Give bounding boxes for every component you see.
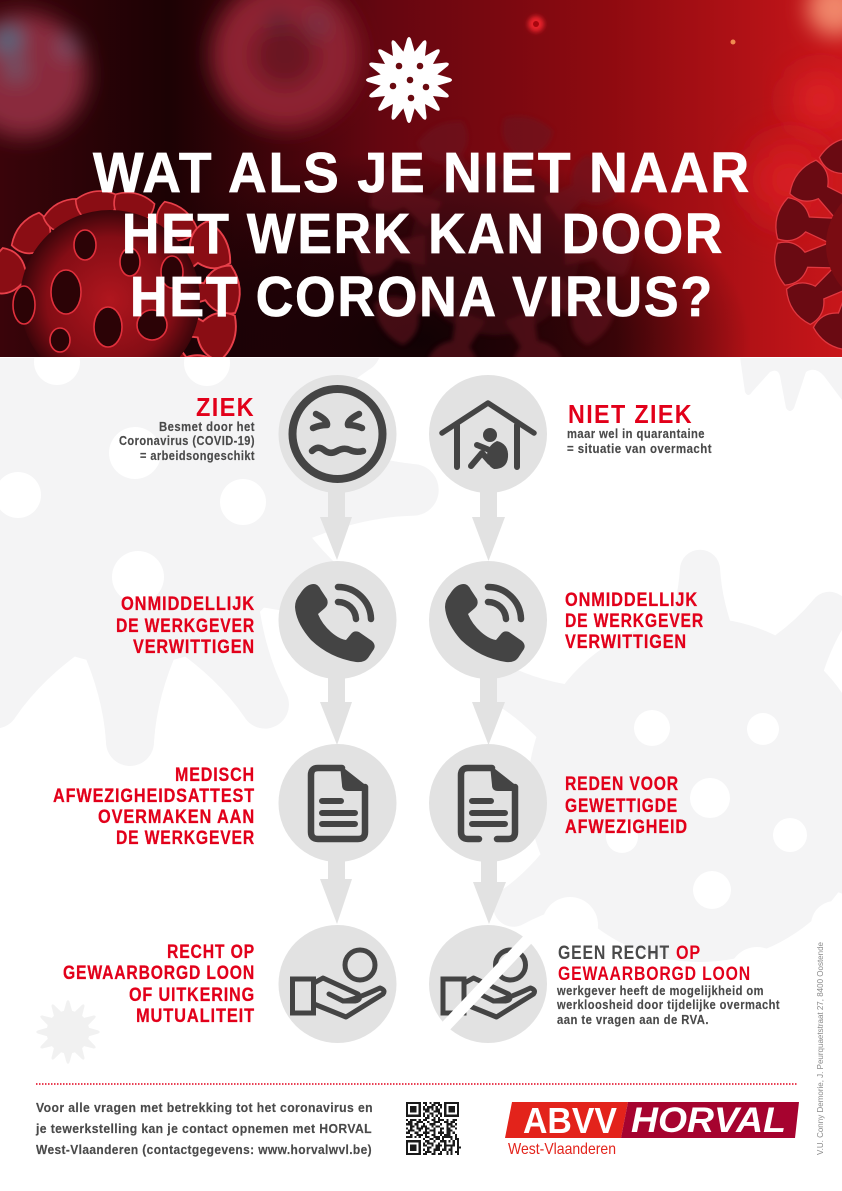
footer contact text: Voor alle vragen met betrekking tot het coronavirus en (36, 1101, 373, 1115)
text: niet ziek: = situatie van overmacht (567, 442, 712, 456)
background pale virus shapes (0, 294, 842, 1064)
text: ziek: Besmet door het (159, 420, 255, 434)
text: geen recht op loon: werkgever heeft de mogelijkheid om (556, 984, 764, 998)
icon: phone left (295, 584, 375, 662)
title (93, 141, 751, 329)
arrow right 1 (472, 490, 505, 561)
step circles (278, 375, 547, 1043)
arrow left 1 (320, 490, 352, 560)
glow spots (528, 0, 842, 220)
text: onmiddellijk right (565, 590, 704, 653)
icon: hand with coin right, crossed out (443, 937, 534, 1026)
text: recht op loon: OF UITKERING (129, 985, 255, 1006)
text: onmiddellijk left: DE WERKGEVER (116, 616, 255, 637)
text: onmiddellijk right: ONMIDDELLIJK (565, 590, 698, 611)
vertical legal text: V.U. Conny Demorie, J. Peurquaetstraat 27, 8400 Oostende (815, 942, 825, 1155)
text: niet ziek (567, 401, 712, 456)
arrow left 2 (320, 675, 352, 745)
text: medisch attest (53, 765, 255, 849)
title: HET CORONA VIRUS? (130, 265, 714, 329)
logo: ABVV Horval: HORVAL (631, 1101, 786, 1140)
text: recht op loon: RECHT OP (167, 942, 255, 963)
icon: house with person (442, 403, 534, 469)
blurred virus top centre (211, 0, 359, 129)
title: HET WERK KAN DOOR (122, 202, 724, 266)
text: medisch attest: MEDISCH (175, 765, 255, 786)
text: ziek (119, 392, 255, 463)
text: geen recht op loon: OP (676, 942, 701, 964)
text: niet ziek: NIET ZIEK (568, 401, 693, 429)
footer contact text: West-Vlaanderen (contactgegevens: www.horvalwvl.be) (36, 1143, 372, 1157)
pale virus top right (740, 357, 842, 411)
text: recht op loon (63, 942, 255, 1027)
footer contact text: je tewerkstelling kan je contact opnemen met HORVAL (35, 1122, 372, 1136)
text: reden voor afwezigheid (565, 774, 688, 838)
sharp virus right (772, 132, 842, 355)
text: geen recht op loon: werkloosheid door tijdelijke overmacht (556, 998, 780, 1012)
icon: phone right (445, 584, 525, 662)
text: onmiddellijk left (116, 594, 255, 658)
pale virus right (494, 550, 842, 962)
arrows (320, 490, 506, 924)
small pale virus bottom left (36, 1000, 100, 1064)
logo: ABVV Horval: West-Vlaanderen (508, 1141, 616, 1158)
text: geen recht op loon (556, 942, 780, 1027)
text: ziek: Coronavirus (COVID-19) (119, 434, 255, 448)
logo: ABVV Horval (505, 1100, 799, 1158)
icon: white virus (366, 37, 452, 123)
text: reden voor afwezigheid: GEWETTIGDE (565, 796, 678, 817)
text: geen recht op loon: aan te vragen aan de RVA. (557, 1013, 709, 1027)
sharp virus left (0, 190, 241, 357)
arrow left 3 (320, 860, 352, 924)
text: recht op loon: GEWAARBORGD LOON (63, 963, 255, 984)
header photo background (0, 0, 842, 357)
text: onmiddellijk right: DE WERKGEVER (565, 611, 704, 632)
icon: document left (311, 765, 368, 839)
blurred virus centre (356, 118, 631, 357)
text: reden voor afwezigheid: REDEN VOOR (565, 774, 679, 795)
icon: sick face (292, 389, 382, 479)
text: niet ziek: maar wel in quarantaine (567, 427, 705, 441)
QR code (406, 1102, 461, 1155)
text: ziek: = arbeidsongeschikt (140, 449, 255, 463)
text: medisch attest: DE WERKGEVER (116, 828, 255, 849)
text: recht op loon: MUTUALITEIT (136, 1006, 255, 1027)
text: onmiddellijk left: VERWITTIGEN (133, 637, 255, 658)
arrow right 3 (473, 860, 506, 924)
text: medisch attest: AFWEZIGHEIDSATTEST (53, 786, 255, 807)
pale virus left (0, 358, 438, 766)
icon: document right (461, 765, 518, 839)
text: geen recht op loon: GEWAARBORGD LOON (558, 963, 751, 985)
title: WAT ALS JE NIET NAAR (93, 141, 751, 205)
text: reden voor afwezigheid: AFWEZIGHEID (565, 817, 688, 838)
footer contact text (35, 1101, 373, 1157)
text: geen recht op loon: GEEN RECHT (558, 942, 670, 964)
icon: hand with coin left (292, 950, 384, 1017)
text: ziek: ZIEK (196, 392, 255, 422)
text: onmiddellijk right: VERWITTIGEN (565, 632, 687, 653)
blurred virus top left (0, 13, 87, 137)
text: onmiddellijk left: ONMIDDELLIJK (121, 594, 255, 615)
text: medisch attest: OVERMAKEN AAN (98, 807, 255, 828)
arrow right 2 (472, 675, 505, 745)
logo: ABVV Horval: ABVV (523, 1100, 617, 1141)
